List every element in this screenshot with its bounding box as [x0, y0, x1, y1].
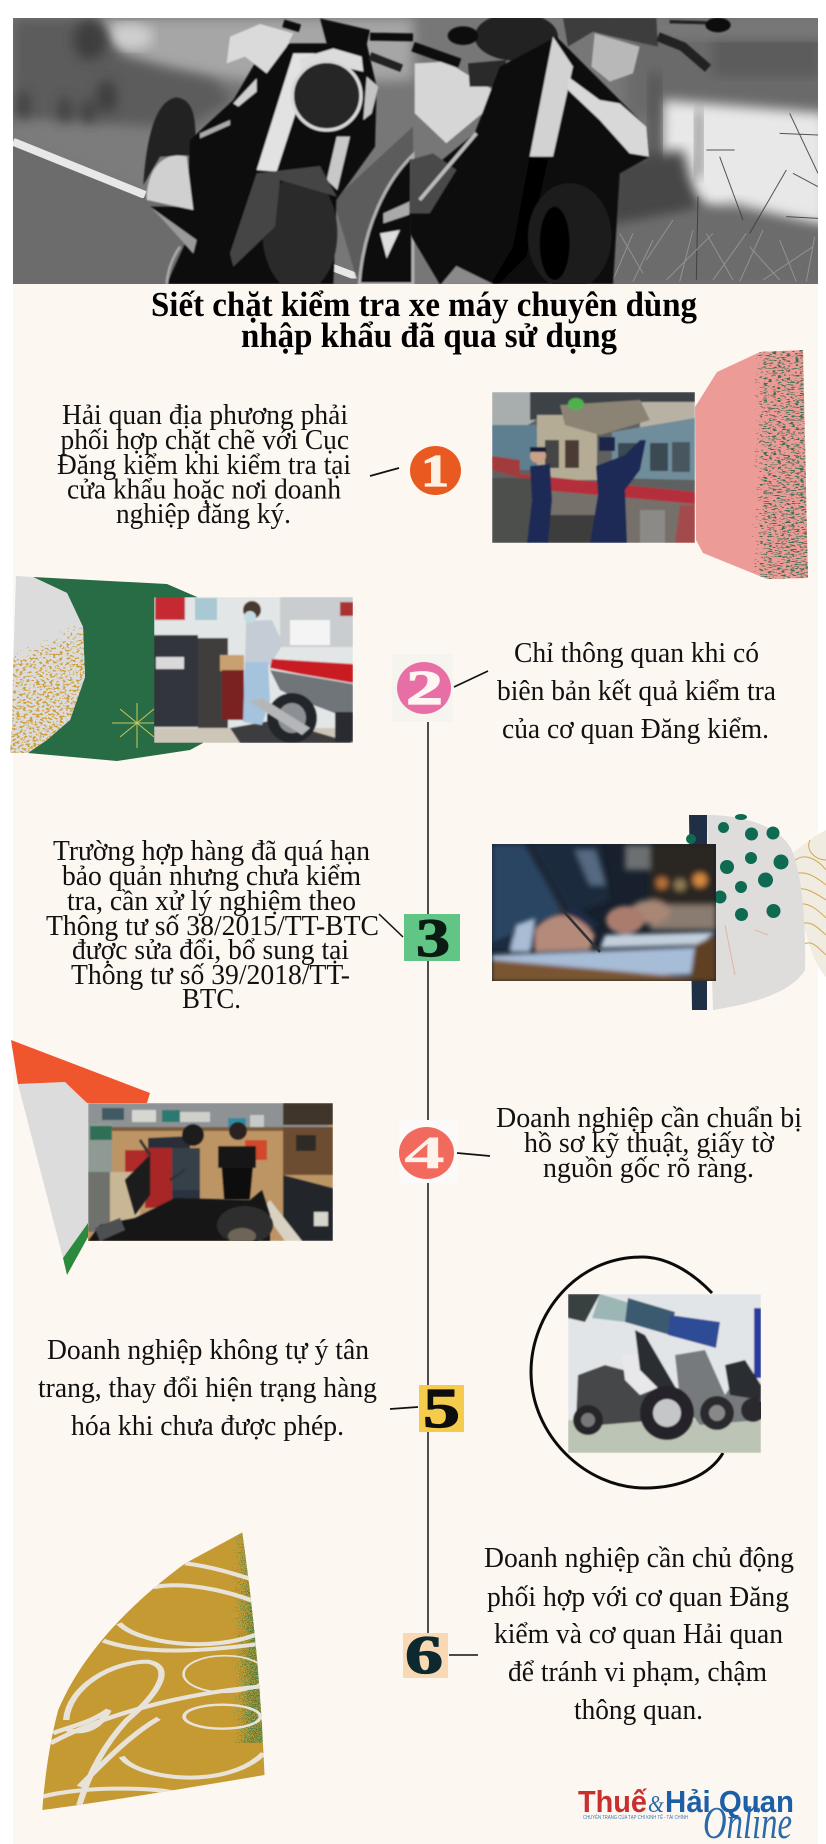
step 3 text [46, 836, 379, 1015]
step 3 text: bảo quản nhưng chưa kiểm [62, 861, 361, 892]
badge 4: 4 [404, 1127, 445, 1179]
step 3 panel [46, 814, 826, 1015]
step 2 panel [8, 576, 777, 761]
badge 3 [404, 908, 460, 968]
badge 1: 1 [421, 445, 449, 496]
decorative shape: pink textured [695, 350, 809, 580]
decorative shape: mustard with white squiggles [42, 1530, 270, 1810]
badge 6 [403, 1625, 448, 1685]
step 3 text: được sửa đổi, bổ sung tại [72, 935, 349, 966]
step 3 text: Thông tư số 38/2015/TT-BTC [46, 911, 379, 942]
step 6 text: phối hợp với cơ quan Đăng [487, 1582, 789, 1613]
logo: Thuế & Hải Quan Online: Hải Quan [665, 1784, 794, 1819]
step 3 text: Trường hợp hàng đã quá hạn [53, 836, 370, 867]
title: nhập khẩu đã qua sử dụng [241, 316, 617, 355]
step 1 text: nghiệp đăng ký. [116, 499, 291, 530]
step 1 text: cửa khẩu hoặc nơi doanh [67, 474, 341, 506]
decorative shape: navy strip, grey blob with green dots and gold loops [686, 814, 826, 1010]
step 1 panel [57, 350, 809, 580]
title [151, 285, 697, 355]
badge 1 [410, 445, 461, 496]
step 5 text: hóa khi chưa được phép. [71, 1411, 344, 1442]
badge 4 [399, 1120, 458, 1183]
step 6 text [484, 1543, 794, 1726]
step 4 photo: mechanics in workshop [88, 1103, 333, 1244]
step 1 text: Hải quan địa phương phải [62, 400, 348, 431]
step 6 text: kiểm và cơ quan Hải quan [494, 1619, 783, 1650]
badge 2 [392, 654, 453, 722]
connector 1 [370, 468, 399, 476]
connector 3 [379, 914, 403, 937]
badge 2: 2 [406, 660, 443, 715]
decorative shape: orange, grey and green [11, 1040, 150, 1275]
step 1 photo: customs officers inspecting truck [492, 392, 695, 543]
step 6 text: để tránh vi phạm, chậm [508, 1657, 767, 1688]
decorative shape: green and grey [8, 576, 215, 761]
step 2 text: của cơ quan Đăng kiểm. [502, 714, 769, 745]
connector 5 [390, 1407, 418, 1409]
logo: Thuế & Hải Quan Online: Thuế [578, 1784, 648, 1819]
step 4 text [496, 1103, 802, 1184]
logo: Thuế & Hải Quan Online: & [648, 1792, 664, 1818]
step 3 text: tra, cần xử lý nghiệm theo [67, 886, 356, 917]
step 6 text: thông quan. [574, 1695, 703, 1726]
connector 2 [454, 671, 488, 687]
badge 5 [419, 1378, 464, 1440]
step 1 text: Đăng kiểm khi kiểm tra tại [57, 450, 351, 481]
badge 5: 5 [423, 1378, 460, 1440]
connector 6 [449, 1654, 478, 1656]
step 5 text: Doanh nghiệp không tự ý tân [47, 1335, 369, 1366]
logo: Thuế & Hải Quan Online [578, 1784, 794, 1844]
step 3 photo: hand signing document [492, 844, 716, 981]
step 5 text: trang, thay đổi hiện trạng hàng [38, 1373, 377, 1404]
badge 3: 3 [416, 908, 450, 968]
decorative circle outline [531, 1257, 723, 1488]
step 4 text: nguồn gốc rõ ràng. [543, 1153, 754, 1184]
step 3 text: Thông tư số 39/2018/TT- [71, 960, 350, 991]
title: Siết chặt kiểm tra xe máy chuyên dùng [151, 285, 697, 324]
logo: Thuế & Hải Quan Online: CHUYÊN TRANG CỦA TẠP CHÍ KINH TẾ - TÀI CHÍNH [583, 1813, 688, 1821]
step 2 text [497, 638, 777, 745]
step 2 text: biên bản kết quả kiểm tra [497, 676, 777, 707]
step 1 text [57, 400, 351, 530]
step 3 text: BTC. [182, 984, 241, 1015]
step 4 text: Doanh nghiệp cần chuẩn bị [496, 1103, 802, 1134]
badge 6: 6 [405, 1625, 443, 1685]
connector 4 [457, 1153, 490, 1156]
step 5 text [38, 1335, 377, 1442]
step 5 panel [38, 1257, 765, 1488]
timeline vertical line [427, 721, 429, 1634]
hero photo: two motorcycles [13, 13, 826, 292]
step 2 photo: inspector with motorbike [154, 597, 353, 743]
step 1 text: phối hợp chặt chẽ với Cục [60, 425, 349, 456]
step 5 photo: motorcycles in showroom [568, 1294, 765, 1453]
step 6 panel [42, 1530, 794, 1810]
step 4 panel [11, 1040, 802, 1275]
step 4 text: hồ sơ kỹ thuật, giấy tờ [524, 1128, 775, 1159]
step 2 text: Chỉ thông quan khi có [514, 638, 759, 669]
step 6 text: Doanh nghiệp cần chủ động [484, 1543, 794, 1574]
